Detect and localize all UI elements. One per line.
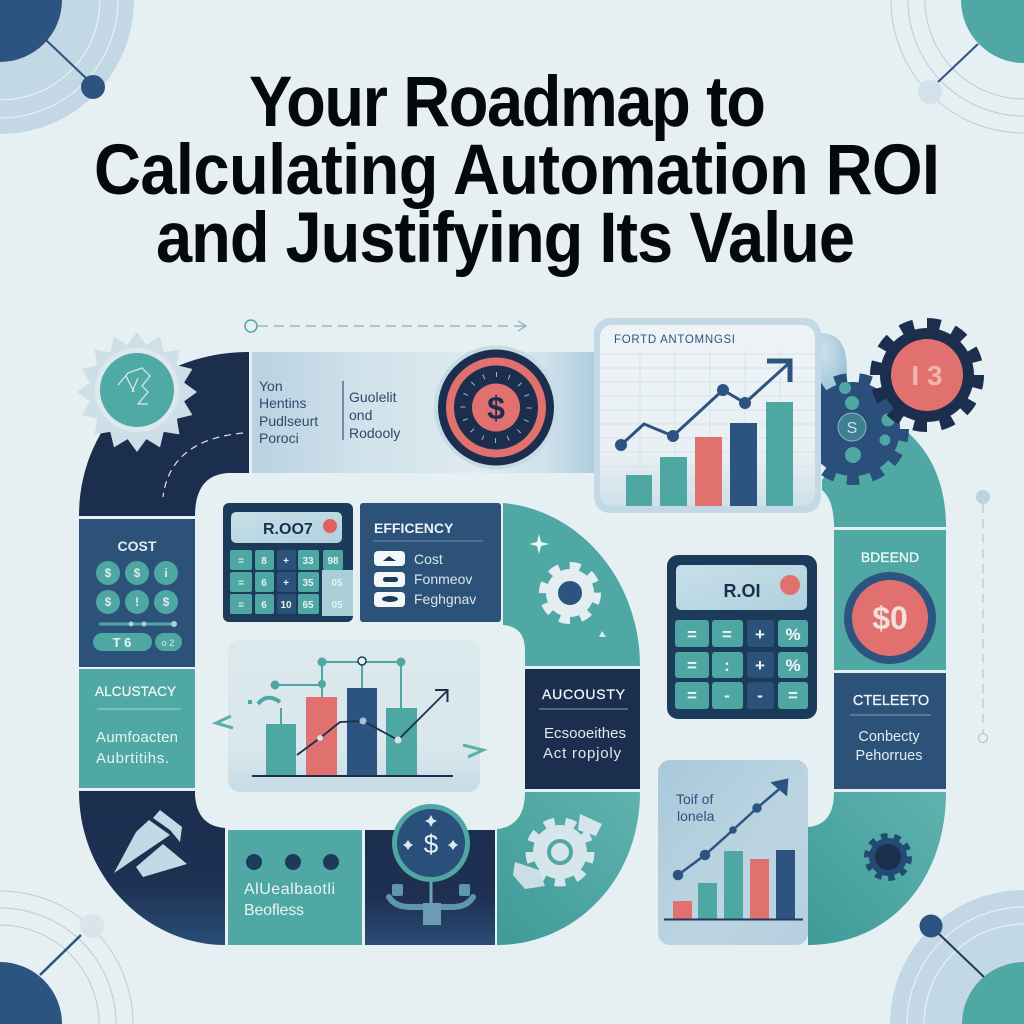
panel: bdeend <box>834 530 946 670</box>
cost buttons <box>93 633 182 651</box>
calculator key labels: = <box>687 686 697 705</box>
bottom chart heading: Toif of <box>676 791 713 807</box>
report title: FORTD ANTOMNGSI <box>614 334 735 346</box>
cost coin symbols: i <box>164 566 168 580</box>
panel: cteleeto: CTELEETO <box>853 693 929 709</box>
panel: calculator small: R.OO7 <box>263 521 313 538</box>
calculator key labels: = <box>722 625 732 644</box>
panel: cteleeto: Conbecty <box>858 729 920 745</box>
calculator key labels: 6 <box>261 578 267 589</box>
band text: right column: ond <box>349 407 372 423</box>
panel: bottom teal text <box>228 830 362 945</box>
calculator key labels: - <box>757 686 763 705</box>
calculator key labels: + <box>283 556 289 567</box>
chart trend line <box>297 690 448 755</box>
title: and Justifying Its Value <box>156 198 855 278</box>
cost coin symbols: $ <box>134 566 141 580</box>
band text: left column: Hentins <box>259 395 306 411</box>
report grid <box>600 350 815 500</box>
panel: aucousty: Act ropjoly <box>543 745 622 762</box>
panel: calculator small <box>223 503 353 622</box>
icon: blue gear: S <box>847 420 857 437</box>
icon: white gear <box>513 814 602 889</box>
calculator keys <box>675 620 808 709</box>
corner decoration: bottom right <box>890 890 1024 1024</box>
calculator keys <box>230 550 343 614</box>
band text: left column <box>259 378 318 446</box>
calculator key labels <box>687 625 801 705</box>
panel: aucousty: Ecsooeithes <box>544 725 626 742</box>
calculator display <box>676 565 807 610</box>
efficiency labels: Feghgnav <box>414 591 476 607</box>
cost buttons: o 2 <box>162 638 174 648</box>
calculator key labels: = <box>687 656 697 675</box>
calculator key labels: + <box>755 625 765 644</box>
chart bars <box>252 688 453 776</box>
band text: right column <box>349 389 400 441</box>
bottom chart heading: lonela <box>677 808 715 824</box>
title <box>94 62 940 278</box>
cost coin symbols <box>105 566 170 609</box>
efficiency labels: Fonmeov <box>414 571 472 587</box>
calculator key labels: 6 <box>261 600 267 611</box>
panel: accuracy: ALCUSTACY <box>95 684 176 699</box>
calculator key labels: = <box>788 686 798 705</box>
panel: top teal gear curve <box>503 503 640 666</box>
efficiency labels <box>414 551 476 607</box>
calculator display <box>231 512 342 543</box>
panel: efficiency <box>360 503 501 622</box>
icon: shards <box>114 810 187 877</box>
chart side arrows <box>216 716 483 757</box>
path segment: top-right curve <box>822 430 946 527</box>
panel: report chart <box>594 318 821 513</box>
panel: calculator large <box>667 555 817 719</box>
corner decoration: top right <box>891 0 1024 133</box>
icon: coin stand <box>389 804 473 925</box>
calculator key labels: 65 <box>302 600 314 611</box>
report trend line <box>616 361 790 450</box>
title: Your Roadmap to <box>249 62 766 142</box>
panel: cost <box>79 519 195 667</box>
calculator key labels: = <box>687 625 697 644</box>
band text: right column: Rodooly <box>349 425 400 441</box>
calculator key labels: % <box>785 656 801 675</box>
corner decoration: bottom left <box>0 891 133 1024</box>
bottom chart heading <box>676 791 715 824</box>
band text: left column: Poroci <box>259 430 299 446</box>
band text: right column: Guolelit <box>349 389 397 405</box>
calculator overlay key <box>322 570 353 616</box>
panel: cteleeto: Pehorrues <box>856 748 922 764</box>
dashed arrow: top <box>245 320 526 332</box>
toggle marks <box>382 556 398 602</box>
cost coin symbols: $ <box>105 595 112 609</box>
calculator key labels: % <box>785 625 801 644</box>
panel: bottom teal text: AlUealbaotli <box>244 881 335 898</box>
calculator key labels: 33 <box>302 556 314 567</box>
calculator key labels: 10 <box>280 600 292 611</box>
panel: bdeend: BDEEND <box>861 549 919 565</box>
panel: efficiency: EFFICENCY <box>374 520 454 536</box>
panel: bottom teal text: Beofless <box>244 902 304 919</box>
calculator key labels: = <box>238 578 244 589</box>
calculator key labels: 8 <box>261 556 267 567</box>
icon: sparkle <box>529 534 549 554</box>
calculator key labels: = <box>238 556 244 567</box>
panel: accuracy <box>79 669 195 788</box>
cost coin symbols: ! <box>135 595 139 609</box>
panel: aucousty <box>525 669 640 789</box>
icon: coin stand: $ <box>424 829 439 859</box>
corner decoration: top left <box>0 0 134 134</box>
icon: blue gear <box>802 333 904 480</box>
band text: left column: Pudlseurt <box>259 413 318 429</box>
calculator key labels: - <box>724 686 730 705</box>
panel: inner bar chart <box>216 640 483 792</box>
connector nodes <box>248 657 404 724</box>
panel: bottom teal gear curve <box>497 792 640 945</box>
icon: left gear <box>77 332 197 452</box>
icon: dollar dial <box>434 346 558 470</box>
calculator key labels <box>238 556 343 611</box>
dashed connector: right <box>976 490 990 742</box>
icon: zero dollar coin: $0 <box>872 600 908 636</box>
title: Calculating Automation ROI <box>94 130 940 210</box>
report bars <box>626 402 793 506</box>
calculator key labels: : <box>724 656 730 675</box>
calculator key labels: 98 <box>327 556 339 567</box>
panel: accuracy: Aumfoacten <box>96 729 178 746</box>
band divider <box>342 381 344 440</box>
panel: cteleeto <box>834 673 946 789</box>
icon: dollar dial: $ <box>487 390 505 426</box>
icon: red gear: I 3 <box>911 360 943 391</box>
calculator key labels: + <box>283 578 289 589</box>
efficiency labels: Cost <box>414 551 443 567</box>
panel: calculator large: R.OI <box>723 581 761 601</box>
calculator key labels: 05 <box>331 578 343 589</box>
cost coin symbols: $ <box>105 566 112 580</box>
panel: cost: COST <box>118 538 157 554</box>
bottom chart bars <box>664 850 803 920</box>
cost coin grid <box>96 561 178 614</box>
icon: white gear small <box>543 566 597 620</box>
band text: left column: Yon <box>259 378 283 394</box>
path segment: top-left curve <box>79 352 249 516</box>
panel: aucousty: AUCOUSTY <box>542 686 626 702</box>
cost slider <box>99 621 177 627</box>
panel: top band <box>252 352 598 473</box>
panel: accuracy: Aubrtitihs. <box>96 750 169 767</box>
cost buttons: T 6 <box>113 635 131 650</box>
bottom chart trend <box>674 780 787 879</box>
icon: dark gear <box>869 838 907 876</box>
panel: bottom chart <box>658 760 808 945</box>
icon: red gear <box>876 324 978 426</box>
cost coin symbols: $ <box>163 595 170 609</box>
calculator key labels: = <box>238 600 244 611</box>
efficiency toggles <box>374 551 405 607</box>
calculator key labels: 05 <box>331 600 343 611</box>
calculator key labels: 35 <box>302 578 314 589</box>
panel: bottom navy <box>365 830 495 945</box>
icon: small triangle <box>599 631 606 637</box>
panel: bottom-right curve <box>808 792 946 945</box>
panel: bottom-left curve <box>79 791 225 945</box>
coin dots <box>246 854 339 870</box>
calculator key labels: + <box>755 656 765 675</box>
